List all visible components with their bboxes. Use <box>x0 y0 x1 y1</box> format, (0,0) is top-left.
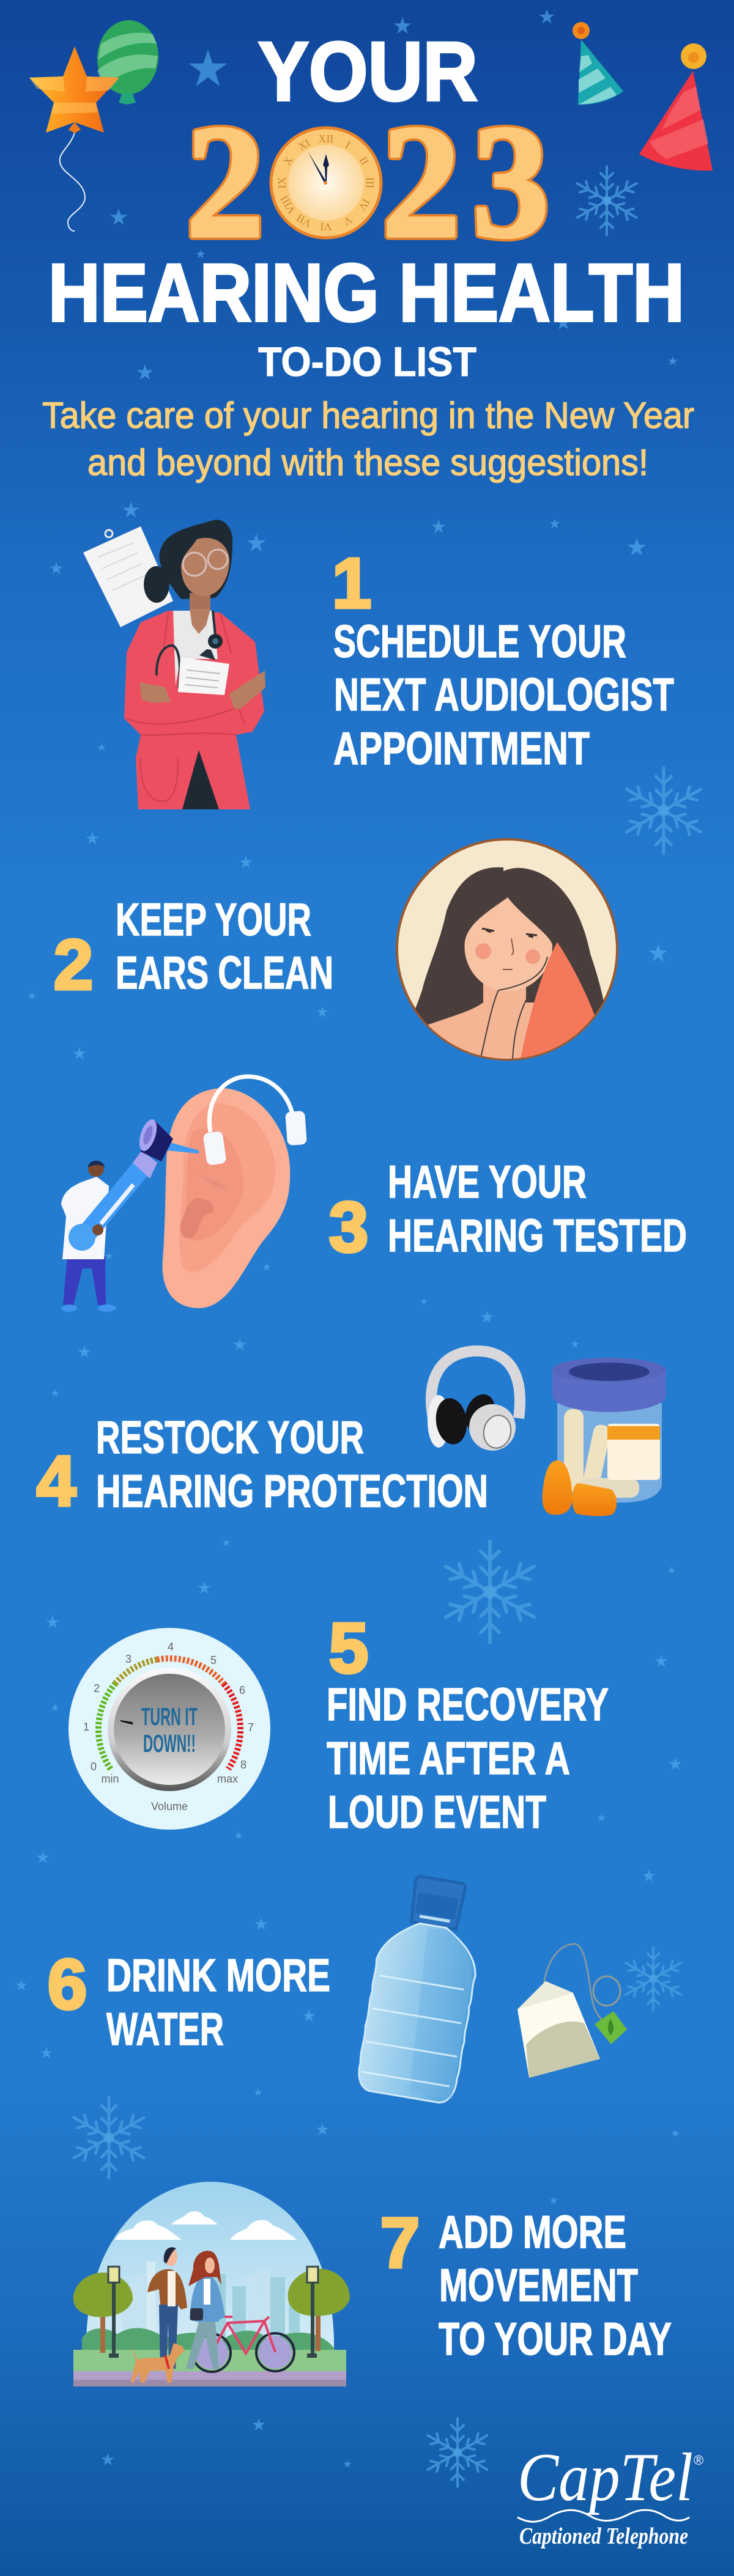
illustration: water bottle <box>355 1871 490 2105</box>
bottle cap <box>409 1875 466 1930</box>
digit fills: 2 <box>186 92 264 271</box>
knob text: TURN IT <box>141 1702 198 1731</box>
clock face as zero: VI <box>321 221 332 233</box>
hands <box>139 682 171 703</box>
clouds <box>115 2211 297 2240</box>
sky dome <box>86 2182 334 2353</box>
digit outlines: 3 <box>472 92 549 271</box>
man <box>147 2247 187 2369</box>
dog <box>131 2343 185 2383</box>
step 2: KEEP YOUR <box>116 894 311 945</box>
small doctor figure <box>61 1161 116 1312</box>
clock face as zero: VIII <box>278 194 298 216</box>
clock face as zero: II <box>357 155 371 167</box>
illustration: jar of ear plugs <box>543 1358 666 1516</box>
step 6: 6 <box>48 1945 87 2024</box>
digit fills: 2 <box>382 92 461 271</box>
step 2: EARS CLEAN <box>116 947 333 998</box>
scale labels: 6 <box>239 1684 245 1696</box>
knob text <box>141 1702 198 1757</box>
otoscope <box>69 1117 199 1251</box>
icon: orange star balloon with string <box>29 46 119 231</box>
step 1: 1 <box>332 543 371 623</box>
intro text: and beyond with these suggestions! <box>87 442 648 483</box>
step 7: ADD MORE <box>439 2206 626 2258</box>
logo: CapTel <box>517 2440 703 2549</box>
digit outlines: 2 <box>186 92 264 271</box>
intro text: Take care of your hearing in the New Year <box>42 395 694 436</box>
subtitle: TO-DO LIST: TO-DO LIST <box>258 339 476 385</box>
step 5: TIME AFTER A <box>327 1732 570 1784</box>
lamp posts <box>108 2267 318 2358</box>
title: YOUR: YOUR <box>258 25 478 119</box>
clock face as zero: XI <box>296 136 312 153</box>
clock face as zero: IX <box>276 177 288 188</box>
title: 2023 with clock <box>186 92 549 271</box>
scale labels: Volume <box>151 1800 188 1812</box>
large clipboard <box>83 526 173 627</box>
chest clipboard <box>178 657 229 695</box>
icon: teal party hat <box>573 22 623 105</box>
trees <box>73 2269 350 2353</box>
illustration: volume dial <box>69 1628 270 1830</box>
red lab coat <box>124 611 264 809</box>
step 4: 4 <box>37 1441 76 1521</box>
scale labels: 7 <box>248 1721 254 1734</box>
woman <box>186 2251 225 2369</box>
knob <box>108 1668 231 1791</box>
scale labels <box>83 1641 254 1812</box>
scale labels: 4 <box>168 1641 174 1653</box>
clock face as zero: X <box>281 154 295 167</box>
icon: green balloon <box>95 18 161 105</box>
step 6 <box>48 1945 330 2055</box>
hearing aid <box>203 1076 307 1166</box>
skyline <box>122 2262 300 2341</box>
step 6: DRINK MORE <box>106 1949 330 2001</box>
step 6: WATER <box>106 2003 224 2055</box>
ear <box>163 1088 290 1308</box>
step 2 <box>54 894 333 1004</box>
step 4: HEARING PROTECTION <box>96 1465 488 1517</box>
icon: red party hat <box>639 43 713 171</box>
step 5: FIND RECOVERY <box>327 1679 609 1730</box>
illustration: couple walking in park <box>73 2182 350 2386</box>
clock face as zero: V <box>341 213 355 228</box>
background snowflakes <box>70 166 705 2487</box>
illustration: headphones <box>428 1351 520 1455</box>
bottle body <box>355 1917 483 2105</box>
step 5: LOUD EVENT <box>328 1786 546 1838</box>
step 1: SCHEDULE YOUR <box>333 616 626 667</box>
digit fills: 3 <box>472 92 549 271</box>
step 3 <box>329 1156 687 1267</box>
step 7: MOVEMENT <box>439 2259 638 2311</box>
digit outlines: 2 <box>382 92 461 271</box>
step 3: 3 <box>329 1187 368 1267</box>
illustration: tea bag <box>517 1944 627 2078</box>
digit fills <box>186 92 549 271</box>
step 5: 5 <box>329 1608 368 1688</box>
illustration: woman drying ear with towel <box>397 839 617 1064</box>
scale labels: min <box>101 1773 119 1785</box>
step 4: RESTOCK YOUR <box>96 1411 364 1463</box>
step 3: HAVE YOUR <box>388 1156 587 1207</box>
clock face as zero <box>271 128 381 238</box>
scale labels: 5 <box>210 1654 217 1666</box>
step 7 <box>380 2203 672 2364</box>
digit outlines <box>186 92 549 271</box>
step 1: APPOINTMENT <box>333 723 590 774</box>
logo: CapTel: CapTel <box>517 2440 693 2515</box>
clock face as zero: VII <box>294 212 314 230</box>
logo: CapTel: ® <box>694 2453 703 2468</box>
ground and path <box>73 2350 346 2371</box>
scale labels: max <box>217 1773 238 1785</box>
knob text: DOWN!! <box>143 1729 196 1757</box>
clock face as zero: I <box>343 138 353 151</box>
step 4 <box>37 1411 488 1521</box>
clock face as zero: III <box>364 177 376 188</box>
step 1 <box>332 543 674 774</box>
clock face as zero: XII <box>318 133 334 145</box>
tick arc <box>98 1658 240 1769</box>
illustration: ear, otoscope and doctor <box>61 1076 307 1312</box>
scale labels: 3 <box>125 1653 132 1665</box>
scale labels: 8 <box>240 1759 247 1771</box>
scale labels: 2 <box>94 1682 100 1695</box>
step 2: 2 <box>54 925 93 1004</box>
illustration: doctor with clipboard <box>83 520 265 809</box>
scale labels: 0 <box>91 1761 97 1773</box>
intro text <box>42 395 694 483</box>
bushes <box>82 2328 335 2350</box>
orange ear plugs <box>543 1460 573 1515</box>
step 5 <box>327 1608 609 1838</box>
clock face as zero: IV <box>356 197 373 213</box>
bicycle <box>193 2317 294 2372</box>
scale labels: 1 <box>83 1721 89 1733</box>
step 7: 7 <box>380 2203 420 2283</box>
logo: CapTel: Captioned Telephone <box>519 2523 688 2549</box>
